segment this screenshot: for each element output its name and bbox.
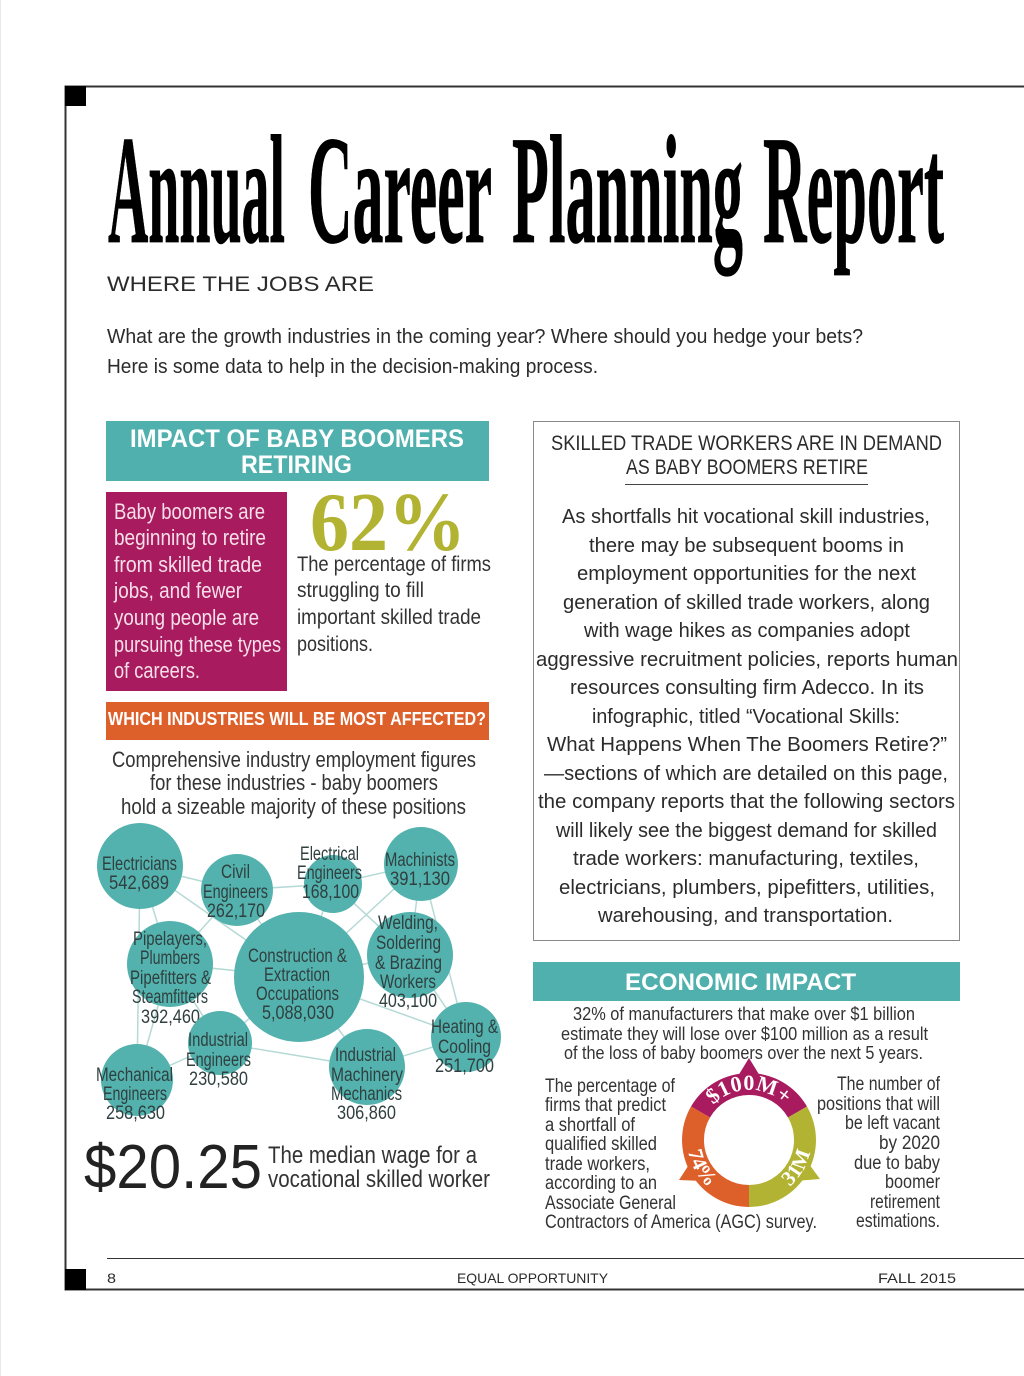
economic impact intro: estimate they will lose over $100 million as a result: [561, 1024, 928, 1044]
node: pipelayers and plumbers: Steamfitters: [132, 987, 208, 1008]
node: industrial machinery mechanics: Machinery: [331, 1065, 403, 1086]
node: construction and extraction: Occupations: [256, 984, 339, 1005]
node: industrial engineers: Industrial: [188, 1030, 248, 1051]
panel: impact of baby boomers heading: [106, 421, 489, 481]
panel: baby boomers callout: of careers.: [114, 658, 200, 683]
article body: employment opportunities for the next: [577, 563, 916, 585]
left description: percentage of firms: Associate General: [545, 1193, 676, 1214]
segment: 31M: 31M: [781, 1148, 810, 1186]
node: pipelayers and plumbers: Pipefitters &: [130, 968, 211, 989]
node: mechanical engineers: Mechanical: [96, 1065, 173, 1086]
panel: skilled trade workers article: [534, 422, 960, 940]
economic impact intro: [561, 1004, 928, 1063]
node: construction and extraction: Extraction: [264, 965, 330, 986]
node: welding, soldering and brazing: Welding,: [378, 913, 438, 934]
node: mechanical engineers: [96, 1044, 173, 1124]
node: pipelayers and plumbers: Pipelayers,: [133, 929, 207, 950]
article body: with wage hikes as companies adopt: [583, 620, 910, 642]
node: welding, soldering and brazing: 403,100: [379, 991, 437, 1012]
node: welding, soldering and brazing: & Brazing: [375, 953, 442, 974]
node: civil engineers: Engineers: [203, 882, 268, 903]
heading: which industries: WHICH INDUSTRIES WILL BE MOST AFFECTED?: [108, 709, 486, 729]
segment: 74%: [682, 1106, 749, 1207]
left description: percentage of firms: Contractors of America (AGC) survey.: [545, 1212, 817, 1233]
segment: 74%: 74%: [688, 1148, 716, 1186]
right description: number of positions: positions that will: [817, 1094, 940, 1115]
industries intro text: hold a sizeable majority of these positions: [121, 794, 466, 819]
median wage description: vocational skilled worker: [268, 1166, 490, 1193]
left description: percentage of firms: The percentage of: [545, 1076, 676, 1097]
segment: $100M+: [691, 1074, 807, 1118]
intro text: [107, 326, 863, 378]
intro text: What are the growth industries in the coming year? Where should you hedge your bets?: [107, 326, 863, 348]
economic impact intro: 32% of manufacturers that make over $1 billion: [573, 1004, 915, 1024]
panel: baby boomers callout: from skilled trade: [114, 552, 262, 577]
right description: number of positions: due to baby: [854, 1153, 940, 1174]
node: electrical engineers: Electrical: [300, 844, 359, 865]
stat description: important skilled trade: [297, 606, 481, 629]
article body: aggressive recruitment policies, reports human: [536, 649, 958, 671]
footer: EQUAL OPPORTUNITY: [457, 1270, 609, 1286]
footer: [107, 1270, 956, 1286]
stat description: The percentage of firms: [297, 553, 491, 576]
node: mechanical engineers: 258,630: [106, 1103, 165, 1124]
right description: number of positions: by 2020: [879, 1133, 940, 1154]
article body: As shortfalls hit vocational skill industries,: [562, 506, 930, 528]
article body: trade workers: manufacturing, textiles,: [573, 848, 919, 870]
node: machinists: [384, 827, 458, 901]
article body: warehousing, and transportation.: [597, 905, 893, 927]
ring chart: economic impact figures: [679, 1058, 820, 1207]
node: electrical engineers: Engineers: [297, 863, 362, 884]
stat description: positions.: [297, 633, 373, 656]
panel: baby boomers callout: beginning to retire: [114, 525, 266, 550]
panel: baby boomers callout: young people are: [114, 605, 259, 630]
economic impact intro: of the loss of baby boomers over the next 5 years.: [564, 1043, 923, 1063]
stat description: struggling to fill: [297, 579, 424, 602]
right description: number of positions: retirement: [870, 1192, 941, 1213]
right description: number of positions: be left vacant: [845, 1113, 941, 1134]
article body: infographic, titled “Vocational Skills:: [592, 706, 900, 728]
panel: impact of baby boomers heading: RETIRING: [241, 451, 352, 479]
industries intro text: for these industries - baby boomers: [150, 770, 438, 795]
left description: percentage of firms: trade workers,: [545, 1154, 650, 1175]
node: industrial machinery mechanics: Industrial: [335, 1045, 396, 1066]
article body: the company reports that the following sectors: [538, 791, 955, 813]
node: heating and cooling: [431, 1002, 501, 1077]
left description: percentage of firms: according to an: [545, 1173, 657, 1194]
node: construction and extraction: [234, 912, 364, 1042]
node: civil engineers: [201, 854, 273, 926]
big stat: median wage: $20.25: [84, 1133, 262, 1202]
node: electricians: [97, 823, 183, 909]
industries intro text: [112, 747, 476, 819]
article body: there may be subsequent booms in: [589, 535, 904, 557]
right description: number of positions: The number of: [837, 1074, 941, 1095]
article heading: [551, 432, 942, 485]
article heading: AS BABY BOOMERS RETIRE: [626, 456, 868, 479]
article body: What Happens When The Boomers Retire?”: [547, 734, 947, 756]
node: welding, soldering and brazing: Soldering: [376, 933, 441, 954]
left description: percentage of firms: qualified skilled: [545, 1134, 657, 1155]
node: pipelayers and plumbers: 392,460: [141, 1007, 200, 1028]
article body: electricians, plumbers, pipefitters, utilities,: [559, 877, 935, 899]
heading: economic impact: [533, 962, 960, 1001]
left description: percentage of firms: firms that predict: [545, 1095, 667, 1116]
footer: 8: [107, 1270, 116, 1286]
footer: FALL 2015: [878, 1270, 956, 1286]
article body: —sections of which are detailed on this page,: [544, 763, 948, 785]
node: civil engineers: Civil: [221, 862, 250, 883]
industries intro text: Comprehensive industry employment figures: [112, 747, 476, 772]
heading: economic impact: ECONOMIC IMPACT: [625, 969, 856, 996]
title: [108, 104, 944, 276]
big stat: 62%: 62%: [310, 476, 466, 569]
node: industrial machinery mechanics: Mechanics: [331, 1084, 402, 1105]
node: electrical engineers: 168,100: [302, 882, 359, 903]
node: welding, soldering and brazing: Workers: [380, 972, 436, 993]
segment: 31M: [749, 1106, 816, 1207]
article heading: SKILLED TRADE WORKERS ARE IN DEMAND: [551, 432, 942, 455]
node: construction and extraction: 5,088,030: [262, 1003, 334, 1024]
article body: resources consulting firm Adecco. In its: [570, 677, 924, 699]
stat description: [297, 553, 491, 656]
node: electricians: 542,689: [109, 873, 169, 894]
left description: percentage of firms: [545, 1076, 817, 1233]
panel: baby boomers callout: jobs, and fewer: [113, 578, 242, 603]
article body: [536, 506, 958, 927]
node: electricians: Electricians: [102, 854, 177, 875]
title: Career: [308, 104, 492, 276]
node: machinists: Machinists: [385, 850, 455, 871]
node: pipelayers and plumbers: Plumbers: [140, 948, 200, 969]
intro text: Here is some data to help in the decision-making process.: [107, 356, 598, 378]
node: heating and cooling: 251,700: [435, 1056, 494, 1077]
node: construction and extraction: Construction &: [248, 946, 347, 967]
network chart: industry employment: [96, 823, 501, 1124]
node: industrial engineers: 230,580: [189, 1069, 248, 1090]
node: welding, soldering and brazing: [367, 912, 453, 1012]
article body: will likely see the biggest demand for skilled: [555, 820, 937, 842]
segment: $100M+: $100M+: [706, 1076, 789, 1104]
node: heating and cooling: Cooling: [438, 1037, 491, 1058]
right description: number of positions: boomer: [885, 1172, 941, 1193]
node: heating and cooling: Heating &: [431, 1017, 498, 1038]
left description: percentage of firms: a shortfall of: [545, 1115, 636, 1136]
title: Annual: [108, 104, 285, 276]
heading: which industries: [106, 702, 489, 740]
median wage description: The median wage for a: [268, 1142, 478, 1169]
median wage description: [268, 1142, 490, 1193]
right description: number of positions: estimations.: [856, 1211, 940, 1232]
node: industrial machinery mechanics: 306,860: [337, 1103, 396, 1124]
node: machinists: 391,130: [390, 869, 450, 890]
node: pipelayers and plumbers: [127, 921, 213, 1028]
node: industrial engineers: Engineers: [186, 1050, 251, 1071]
panel: baby boomers callout: Baby boomers are: [114, 499, 265, 524]
panel: impact of baby boomers heading: IMPACT OF BABY BOOMERS: [130, 425, 464, 453]
node: industrial engineers: [186, 1011, 252, 1090]
node: mechanical engineers: Engineers: [103, 1084, 167, 1105]
node: civil engineers: 262,170: [207, 901, 265, 922]
panel: baby boomers callout: [106, 492, 287, 691]
panel: baby boomers callout: pursuing these types: [114, 632, 281, 657]
node: industrial machinery mechanics: [329, 1029, 405, 1124]
node: electrical engineers: [297, 844, 362, 913]
article body: generation of skilled trade workers, along: [563, 592, 930, 614]
right description: number of positions: [817, 1074, 941, 1232]
subtitle: WHERE THE JOBS ARE: [107, 273, 374, 296]
